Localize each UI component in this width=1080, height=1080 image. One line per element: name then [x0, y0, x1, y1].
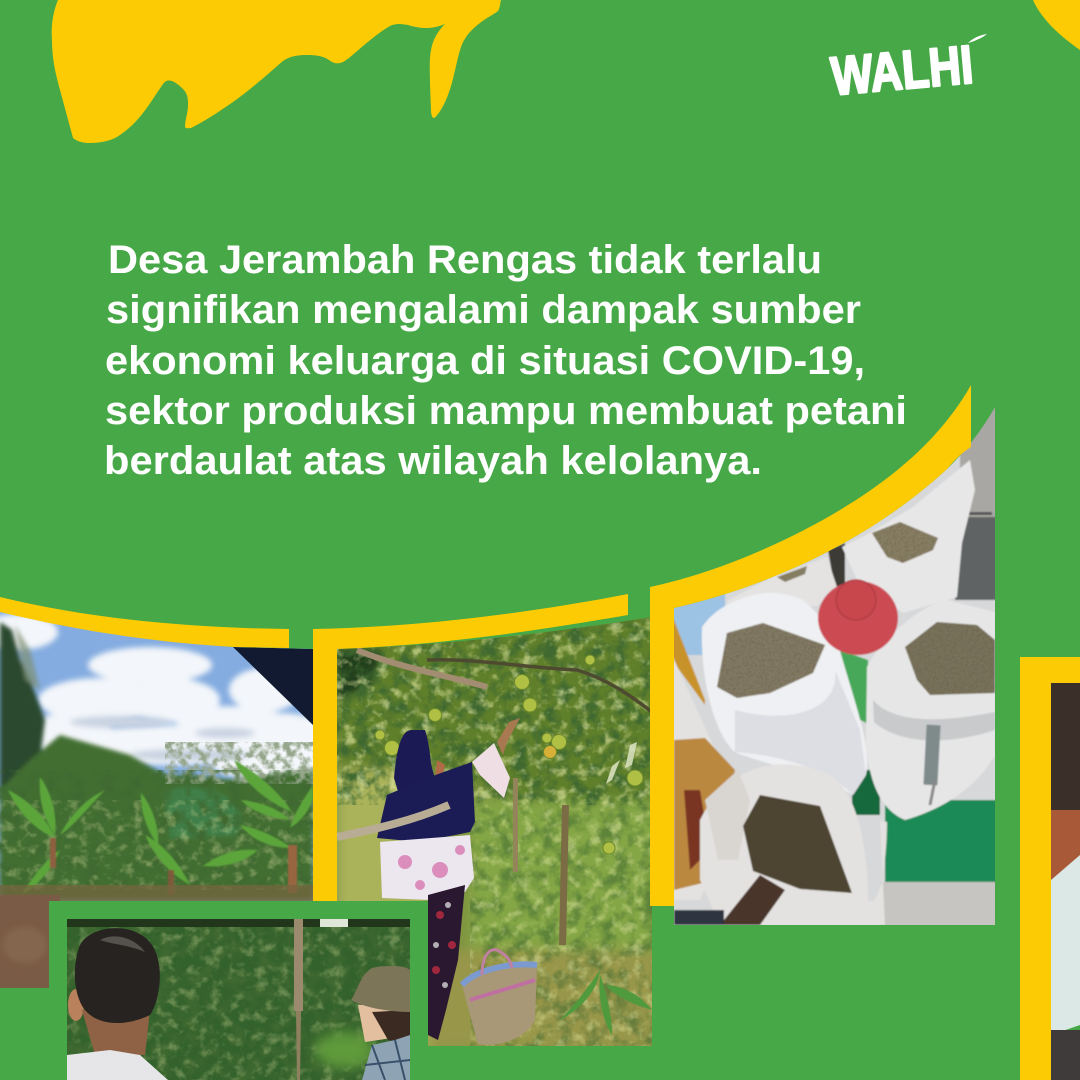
photo: two people in the orchard — [67, 919, 410, 1080]
branches — [357, 650, 487, 687]
dark gap — [828, 543, 845, 590]
back sack middle — [728, 558, 838, 606]
man in white shirt — [67, 928, 168, 1080]
green panel behind lower photo — [49, 901, 428, 1080]
heading text block: Desa Jerambah Rengas tidak terlalu — [108, 238, 822, 282]
woman in hat — [351, 966, 410, 1080]
seedling — [560, 970, 652, 1035]
front sack — [700, 764, 887, 925]
cardboard — [672, 615, 705, 705]
tree trunks — [513, 778, 518, 872]
plastic green — [840, 650, 870, 725]
floor and mat — [880, 882, 995, 925]
stick — [337, 805, 449, 837]
right sack — [866, 600, 995, 820]
yellow band middle with vertical bar — [313, 594, 628, 901]
yellow frame bottom right — [1020, 657, 1080, 1080]
heading text block: ekonomi keluarga di situasi COVID-19, — [105, 339, 865, 383]
heading text block: berdaulat atas wilayah kelolanya. — [104, 439, 762, 483]
oranges — [375, 655, 643, 854]
heading text block: sektor produksi mampu membuat petani — [105, 389, 907, 433]
banana plants — [8, 760, 313, 895]
photo: rice sacks — [670, 400, 1000, 930]
tree trunk — [294, 919, 303, 1011]
yellow paint drip top left — [52, 0, 501, 143]
photo: banana field and sky — [0, 612, 313, 988]
light blue wall — [672, 590, 725, 655]
photo: woman picking oranges — [330, 610, 660, 1050]
back sack right — [842, 460, 975, 613]
photo: cropped seated figure — [1051, 683, 1080, 1080]
rubber tree line — [165, 742, 313, 784]
dark tarp corner — [233, 647, 313, 725]
heading text block — [104, 238, 907, 483]
yellow corner shape top right — [1033, 0, 1080, 50]
door and wall — [960, 407, 995, 518]
basket — [462, 964, 537, 1045]
yellow band left — [0, 597, 289, 648]
WALHI logo: WALHI — [829, 35, 975, 107]
heading text block: signifikan mengalami dampak sumber — [106, 288, 861, 332]
left sack — [702, 593, 867, 795]
woman figure — [377, 718, 520, 1040]
yellow band right with vertical bar — [650, 385, 971, 906]
red bowl — [818, 581, 898, 655]
pale leaves — [606, 742, 637, 784]
